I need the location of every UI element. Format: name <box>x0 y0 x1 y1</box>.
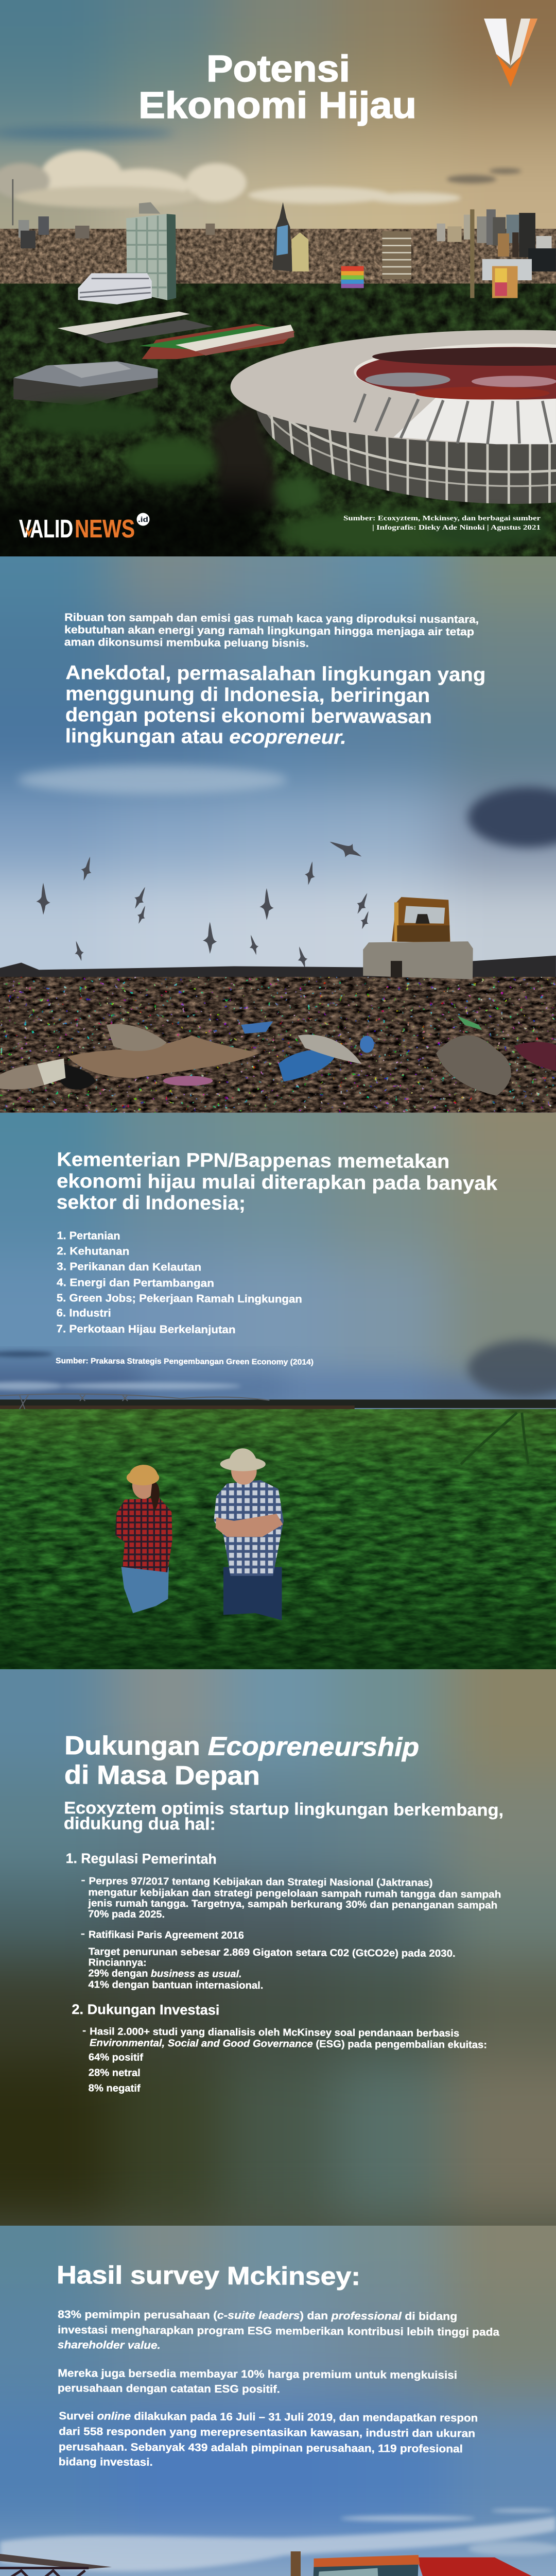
road beside stadium <box>209 401 284 518</box>
Paris Agreement item: Rinciannya: <box>89 1957 147 1969</box>
panel: waste landfill and ecopreneur intro <box>0 556 556 1113</box>
ESG results <box>89 2052 144 2094</box>
small stadium <box>58 312 295 359</box>
paragraph: survey method: Survei online dilakukan pada 16 Juli – 31 Juli 2019, dan mendapatkan respon <box>59 2410 478 2424</box>
subheading: Ecoxyztem optimis startup lingkungan berkembang, <box>64 1798 503 1819</box>
paragraph: investor expectations <box>58 2309 500 2353</box>
McKinsey study text: Environmental, Social and Good Governance (ESG) pada pengembalian ekuitas: <box>90 2037 487 2050</box>
Paris Agreement item: Target penurunan sebesar 2.869 Gigaton setara C02 (GtCO2e) pada 2030. <box>89 1946 456 1959</box>
paragraph: survey method: bidang investasi. <box>59 2456 153 2468</box>
source credit <box>343 515 541 532</box>
paragraph: ESG premium <box>58 2367 457 2396</box>
paragraph: investor expectations: shareholder value. <box>58 2339 161 2351</box>
ESG results: 28% netral <box>89 2067 141 2079</box>
dark storm cloud <box>468 787 556 848</box>
logo: VALIDNEWS.id: NEWS <box>75 515 135 543</box>
heading: Dukungan Ecopreneurship <box>64 1731 419 1762</box>
subheading: didukung dua hal: <box>64 1814 216 1834</box>
dark cloud streak <box>0 127 173 139</box>
graffiti building <box>492 266 518 298</box>
Perpres item: 70% pada 2025. <box>88 1908 165 1920</box>
section 2: investment support <box>72 2002 487 2096</box>
photo: landfill with bulldozer and gulls <box>0 450 556 1112</box>
grey arena roof <box>13 361 158 405</box>
sector list: 6. Industri <box>57 1307 111 1319</box>
woman farmer <box>115 1465 172 1613</box>
sector list: 4. Energi dan Pertambangan <box>57 1277 214 1290</box>
mid right tower <box>382 231 411 279</box>
far buildings <box>12 179 556 280</box>
logo: VALIDNEWS.id <box>19 513 149 543</box>
sector list <box>56 1230 303 1336</box>
logo: VALIDNEWS.id: VALID <box>19 515 73 543</box>
pale cloud streaks <box>0 1351 241 1391</box>
sector list: 2. Kehutanan <box>57 1245 129 1258</box>
spire tower <box>272 202 309 272</box>
main statement <box>65 662 485 749</box>
panel: ecopreneurship support <box>0 1669 556 2226</box>
section 1: government regulation <box>65 1851 501 1992</box>
paragraph: ESG premium: Mereka juga bersedia membayar 10% harga premium untuk mengkuisisi <box>58 2367 457 2381</box>
Paris Agreement item: 29% dengan business as usual. <box>88 1968 242 1980</box>
title: Ekonomi Hijau <box>138 85 416 126</box>
paragraph: ESG premium: perusahaan dengan catatan ESG positif. <box>58 2382 280 2395</box>
McKinsey study text: Hasil 2.000+ studi yang dianalisis oleh McKinsey soal pendanaan berbasis <box>90 2026 459 2039</box>
sector list: 5. Green Jobs; Pekerjaan Ramah Lingkungan <box>57 1292 302 1305</box>
plastic bags foreground <box>0 1016 556 1096</box>
photo: red tractor at a farm <box>0 2119 556 2576</box>
sector list: 1. Pertanian <box>57 1230 120 1242</box>
heading: Hasil survey Mckinsey: <box>57 2261 360 2291</box>
Perpres item: mengatur kebijakan dan strategi pengelolaan sampah rumah tangga dan sampah <box>88 1887 501 1900</box>
source note: Sumber: Prakarsa Strategis Pengembangan Green Economy (2014) <box>56 1357 314 1367</box>
heading <box>57 1149 498 1215</box>
horizon with irrigation rig <box>0 1394 556 1412</box>
white low building <box>78 273 152 304</box>
Paris Agreement item: 41% dengan bantuan internasional. <box>88 1979 263 1991</box>
sky gradient <box>0 450 556 1110</box>
sector list: 3. Perikanan dan Kelautan <box>57 1261 201 1273</box>
McKinsey study text <box>82 2025 487 2050</box>
grass field texture <box>0 1409 556 1669</box>
ESG results: 64% positif <box>89 2052 144 2063</box>
subheading <box>64 1798 503 1835</box>
logo: V mark <box>484 19 537 87</box>
panel: McKinsey survey and tractor <box>0 2226 556 2576</box>
Perpres item: - <box>81 1875 85 1886</box>
gulls <box>36 835 372 970</box>
intro paragraph: aman dikonsumsi membuka peluang bisnis. <box>64 636 309 649</box>
Perpres item <box>81 1875 501 1922</box>
sector list: 7. Perkotaan Hijau Berkelanjutan <box>56 1323 236 1336</box>
paragraph: survey method <box>59 2410 478 2470</box>
green trees mid-ground <box>0 284 556 556</box>
ESG results: 8% negatif <box>89 2082 141 2094</box>
dark cloud <box>468 1340 556 1397</box>
man farmer <box>214 1448 284 1620</box>
heading: ekonomi hijau mulai diterapkan pada banyak <box>57 1171 498 1194</box>
pale cloud <box>18 766 287 794</box>
logo: VALIDNEWS.id: .id <box>138 515 148 523</box>
wispy clouds <box>0 2509 556 2571</box>
heading <box>64 1731 419 1791</box>
sky gradient <box>0 1006 556 1468</box>
foreground trees and dark vignette <box>0 401 549 575</box>
field lighting <box>0 1409 556 1669</box>
panel: green economy sectors and farmers <box>0 1113 556 1669</box>
telecom tower <box>470 209 474 298</box>
paragraph: investor expectations: investasi mengharapkan program ESG memberikan kontribusi lebih tinggi pada <box>58 2324 499 2338</box>
main stadium <box>231 330 556 504</box>
trash ground texture <box>0 977 556 1112</box>
bulldozer <box>363 897 473 979</box>
heading: di Masa Depan <box>64 1760 260 1790</box>
main statement: dengan potensi ekonomi berwawasan <box>65 704 432 728</box>
red feed tank <box>416 2557 537 2576</box>
intro paragraph <box>64 612 479 650</box>
sky gradient <box>0 2119 556 2576</box>
paragraph: investor expectations: 83% pemimpin perusahaan ( c-suite leaders ) dan professional di bidang <box>58 2309 457 2323</box>
main statement: Anekdotal, permasalahan lingkungan yang <box>65 662 485 686</box>
blurred background <box>0 1563 556 2223</box>
photo: farmers in green field <box>0 1006 556 1669</box>
photo: Jakarta stadium and skyline <box>0 0 556 575</box>
rainbow building <box>341 266 364 288</box>
intro paragraph: kebutuhan akan energi yang ramah lingkungan hingga menjaga air tetap <box>64 624 474 638</box>
section heading: 1. Regulasi Pemerintah <box>66 1851 217 1867</box>
main statement: lingkungan atau ecopreneur. <box>65 725 346 749</box>
McKinsey study text: - <box>82 2025 86 2036</box>
farm shed <box>0 2554 248 2576</box>
big hotel tower <box>126 202 176 300</box>
paragraph: survey method: dari 558 responden yang merepresentasikan kawasan, industri dan ukuran <box>59 2426 475 2439</box>
source credit: | Infografis: Dieky Ade Ninoki | Agustus 2021 <box>372 524 541 532</box>
tractor tracks <box>461 1413 528 1464</box>
title: Potensi <box>206 48 350 90</box>
paragraph: survey method: perusahaan. Sebanyak 439 adalah pimpinan perusahaan, 119 profesional <box>59 2441 463 2455</box>
section heading: 2. Dukungan Investasi <box>72 2002 219 2018</box>
distant city <box>0 229 556 293</box>
source credit: Sumber: Ecoxyztem, Mckinsey, dan berbagai sumber <box>343 515 541 522</box>
colored litter <box>0 977 556 1112</box>
cumulus clouds <box>0 150 461 208</box>
Perpres item: Perpres 97/2017 tentang Kebijakan dan Strategi Nasional (Jaktranas) <box>89 1875 433 1889</box>
distant tree line <box>0 956 556 982</box>
Perpres item: jenis rumah tangga. Targetnya, sampah berkurang 30% dan penanganan sampah <box>88 1897 497 1911</box>
Paris Agreement item: Ratifikasi Paris Agreement 2016 <box>89 1929 244 1941</box>
sky gradient <box>0 0 556 372</box>
title <box>138 48 416 126</box>
Paris Agreement item: - <box>81 1928 85 1939</box>
main statement: menggunung di Indonesia, beriringan <box>65 683 430 707</box>
panel: cover with Jakarta stadium skyline <box>0 0 556 556</box>
heading: sektor di Indonesia; <box>57 1192 246 1214</box>
Paris Agreement item <box>80 1928 456 1992</box>
intro paragraph: Ribuan ton sampah dan emisi gas rumah kaca yang diproduksi nusantara, <box>64 612 479 625</box>
tractor <box>223 2551 458 2576</box>
heading: Kementerian PPN/Bappenas memetakan <box>57 1149 449 1173</box>
